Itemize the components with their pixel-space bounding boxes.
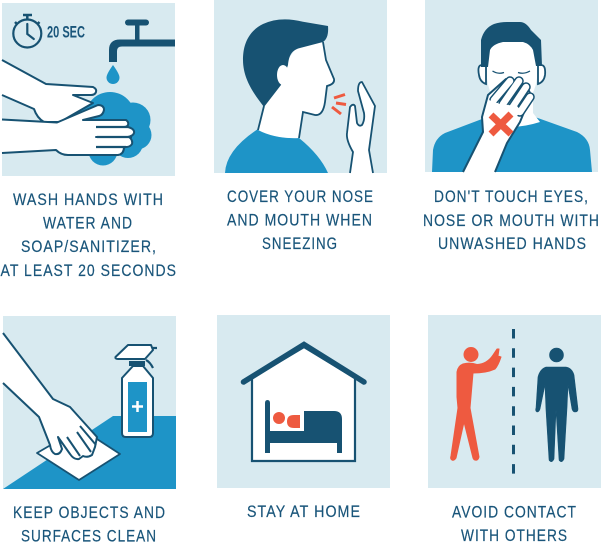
figure: head — [258, 42, 334, 138]
divider: dashed line — [512, 329, 515, 474]
icon: soap foam — [72, 92, 152, 166]
caption: cover nose and mouth: AND MOUTH WHEN — [227, 212, 373, 230]
icon: wipe — [37, 428, 120, 480]
panel: avoid contact — [428, 315, 601, 488]
label: 20 sec: 20 SEC — [47, 22, 85, 42]
icon: sneeze lines — [332, 94, 346, 114]
panel: wash hands — [2, 3, 175, 176]
figure: eyes — [492, 71, 530, 73]
icon: red cross — [491, 114, 511, 134]
icon: tap — [109, 20, 175, 62]
caption: wash hands: SOAP/SANITIZER, — [21, 238, 157, 256]
caption: avoid contact: AVOID CONTACT — [452, 504, 577, 522]
figure: face — [487, 36, 537, 110]
caption: stay at home: STAY AT HOME — [247, 503, 361, 521]
icon: wiping hand — [3, 333, 97, 459]
caption: wash hands — [0, 191, 177, 280]
icon: raised hand — [347, 82, 375, 173]
icon: bed — [265, 400, 342, 453]
surface — [3, 416, 176, 489]
icon: water drop — [106, 65, 120, 84]
caption: avoid contact — [452, 504, 577, 542]
caption: do not touch face — [423, 188, 600, 253]
figure: neck — [493, 88, 540, 127]
panel: stay at home — [217, 315, 390, 488]
icon: back hand — [2, 60, 96, 122]
caption: cover nose and mouth — [227, 188, 374, 253]
caption: cover nose and mouth: COVER YOUR NOSE — [227, 188, 374, 206]
icon: spray bottle — [115, 345, 157, 437]
icon: house — [244, 344, 364, 461]
figure: person pushing away — [451, 348, 501, 460]
caption: wash hands: AT LEAST 20 SECONDS — [0, 262, 177, 280]
icon: hand on face — [463, 79, 531, 172]
caption: clean surfaces: KEEP OBJECTS AND — [13, 504, 166, 522]
figure: ear — [277, 65, 289, 85]
caption: wash hands: WATER AND — [43, 214, 133, 232]
figure: ears — [478, 65, 545, 84]
figure: standing person — [536, 348, 578, 462]
figure: shirt — [432, 117, 592, 172]
figure: shirt — [225, 129, 328, 173]
figure: hair — [481, 22, 542, 67]
caption: clean surfaces — [13, 504, 166, 542]
icon: stopwatch — [13, 15, 41, 48]
caption: wash hands: WASH HANDS WITH — [13, 191, 164, 209]
caption: cover nose and mouth: SNEEZING — [262, 235, 338, 253]
icon: front hand — [2, 105, 134, 155]
icon: sleeping person — [273, 412, 300, 428]
panel: do not touch face — [425, 0, 598, 172]
panel: clean surfaces — [3, 316, 176, 489]
figure: hair — [243, 19, 328, 107]
panel: cover nose and mouth — [214, 0, 387, 173]
